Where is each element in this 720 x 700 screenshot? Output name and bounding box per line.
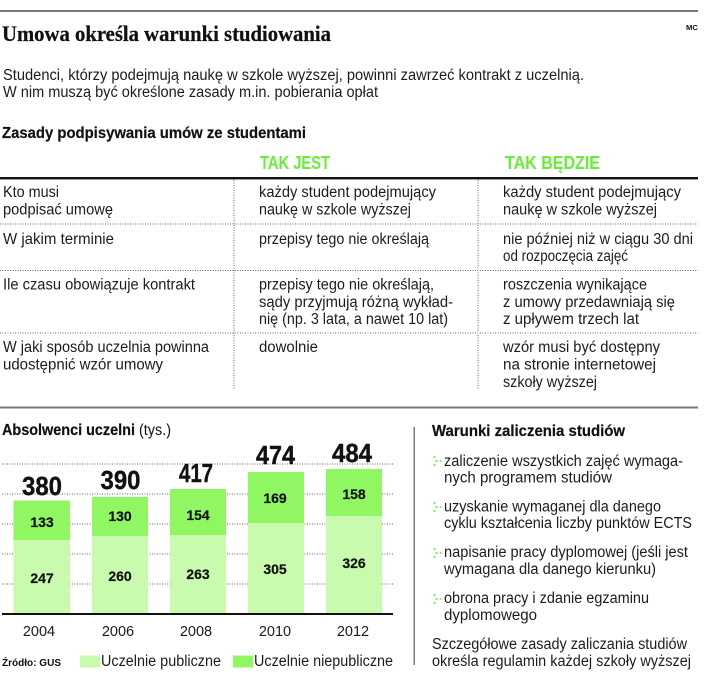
bar 2004: 2004 [23, 624, 55, 640]
legend [80, 653, 393, 670]
title: Umowa określa warunki studiowania [2, 21, 331, 46]
bar 2006: 390 [100, 465, 140, 495]
list item 4: obrona pracy i zdanie egzaminu [444, 590, 649, 607]
bar 2012: 2012 [337, 624, 369, 640]
bar 2008 [170, 458, 226, 640]
bar 2004: 247 [30, 570, 54, 586]
bar 2010: 169 [263, 490, 287, 506]
bar 2010: 2010 [259, 624, 291, 640]
bar 2006 [92, 465, 148, 640]
side panel: Warunki zaliczenia studiów [432, 423, 692, 670]
bar 2012 [326, 438, 382, 640]
list item 2: uzyskanie wymaganej dla danego [444, 498, 661, 516]
row: Ile czasu obowiązuje kontrakt [3, 276, 675, 328]
row: Kto musi podpisać umowę: naukę w szkole wyższej [503, 202, 657, 218]
bar 2010 [248, 440, 304, 640]
legend item: Uczelnie niepubliczne: Uczelnie niepubliczne [254, 653, 393, 670]
row: W jaki sposób: dowolnie [259, 339, 318, 356]
bar 2008: 263 [186, 566, 210, 582]
bar 2012: 484 [332, 438, 372, 468]
row: Ile czasu obowiązuje kontrakt: z umowy przedawniają się [503, 294, 675, 311]
list item 3: napisanie pracy dyplomowej (jeśli jest [444, 544, 689, 561]
row: W jaki sposób: szkoły wyższej [503, 374, 597, 391]
list item 1: zaliczenie wszystkich zajęć wymaga- [444, 453, 683, 470]
list item 2: cyklu kształcenia liczby punktów ECTS [444, 515, 692, 532]
vertical divider [414, 427, 415, 665]
legend item: Uczelnie publiczne: Uczelnie publiczne [101, 653, 221, 670]
row: Kto musi podpisać umowę: podpisać umowę [3, 202, 113, 218]
section rule [0, 406, 698, 408]
closing note [432, 636, 691, 670]
bar 2008: 2008 [180, 624, 212, 640]
row: Ile czasu obowiązuje kontrakt: z upływem trzech lat [503, 311, 640, 328]
chart heading: Absolwenci uczelni (tys.) [2, 422, 171, 439]
intro text [3, 67, 584, 101]
closing note: określa regulamin każdej szkoły wyższej [432, 653, 691, 670]
row: Ile czasu obowiązuje kontrakt: nię (np. 3 lata, a nawet 10 lat) [259, 311, 448, 328]
bar 2004: 133 [30, 514, 54, 530]
row: W jaki sposób: W jaki sposób uczelnia powinna [3, 339, 209, 356]
side panel heading: Warunki zaliczenia studiów [432, 423, 626, 440]
intro text: Studenci, którzy podejmują naukę w szkole wyższej, powinni zawrzeć kontrakt z uczelnią. [3, 67, 584, 84]
list item 3 [433, 544, 689, 578]
bar 2012: 326 [342, 555, 366, 571]
top rule [0, 10, 698, 12]
row: Kto musi podpisać umowę: naukę w szkole wyższej [259, 202, 411, 218]
row: W jakim terminie: nie później niż w ciągu 30 dni [503, 231, 693, 248]
list item 3: wymagana dla danego kierunku) [443, 561, 656, 578]
row: Kto musi podpisać umowę [3, 184, 681, 218]
bar 2010: 305 [263, 561, 287, 577]
list item 4: dyplomowego [444, 607, 537, 624]
bar 2008: 154 [186, 507, 210, 523]
bar 2006: 2006 [102, 624, 134, 640]
row: W jaki sposób: na stronie internetowej [503, 356, 656, 374]
credit: MC: MC [686, 23, 699, 32]
row: Ile czasu obowiązuje kontrakt: Ile czasu obowiązuje kontrakt [3, 276, 196, 294]
list item 1 [433, 453, 683, 486]
row: Kto musi podpisać umowę: Kto musi [3, 184, 59, 201]
row: W jakim terminie: przepisy tego nie określają [259, 231, 429, 248]
bar 2006: 260 [108, 568, 132, 584]
table [0, 152, 698, 391]
source: Źródło: GUS [2, 656, 61, 669]
list item 4 [433, 590, 649, 624]
intro text: W nim muszą być określone zasady m.in. pobierania opłat [3, 84, 379, 101]
bar 2012: 158 [342, 486, 366, 502]
column header: TAK JEST: TAK JEST [260, 152, 331, 173]
bar 2004 [14, 471, 70, 640]
bar 2006: 130 [108, 508, 132, 524]
bar 2004: 380 [22, 471, 62, 501]
column header: TAK BĘDZIE: TAK BĘDZIE [505, 152, 600, 173]
row: W jakim terminie: od rozpoczęcia zajęć [503, 248, 628, 265]
row: W jakim terminie [3, 231, 693, 265]
closing note: Szczegółowe zasady zaliczania studiów [432, 636, 688, 653]
row: W jaki sposób [3, 339, 660, 391]
row: Ile czasu obowiązuje kontrakt: roszczenia wynikające [503, 276, 647, 294]
row: W jakim terminie: W jakim terminie [3, 231, 114, 248]
row: Kto musi podpisać umowę: każdy student podejmujący [259, 184, 436, 201]
row: Kto musi podpisać umowę: każdy student podejmujący [503, 184, 681, 201]
row: W jaki sposób: udostępnić wzór umowy [3, 356, 163, 374]
table heading: Zasady podpisywania umów ze studentami [2, 125, 306, 142]
list item 2 [433, 498, 692, 532]
bar 2010: 474 [256, 440, 295, 470]
row: W jaki sposób: wzór musi być dostępny [502, 339, 660, 356]
row: Ile czasu obowiązuje kontrakt: przepisy tego nie określają, [259, 276, 434, 294]
list item 1: nych programem studiów [444, 470, 613, 486]
bar 2008: 417 [179, 458, 213, 488]
row: Ile czasu obowiązuje kontrakt: sądy przyjmują różną wykład- [259, 294, 453, 311]
bar chart [2, 438, 393, 640]
